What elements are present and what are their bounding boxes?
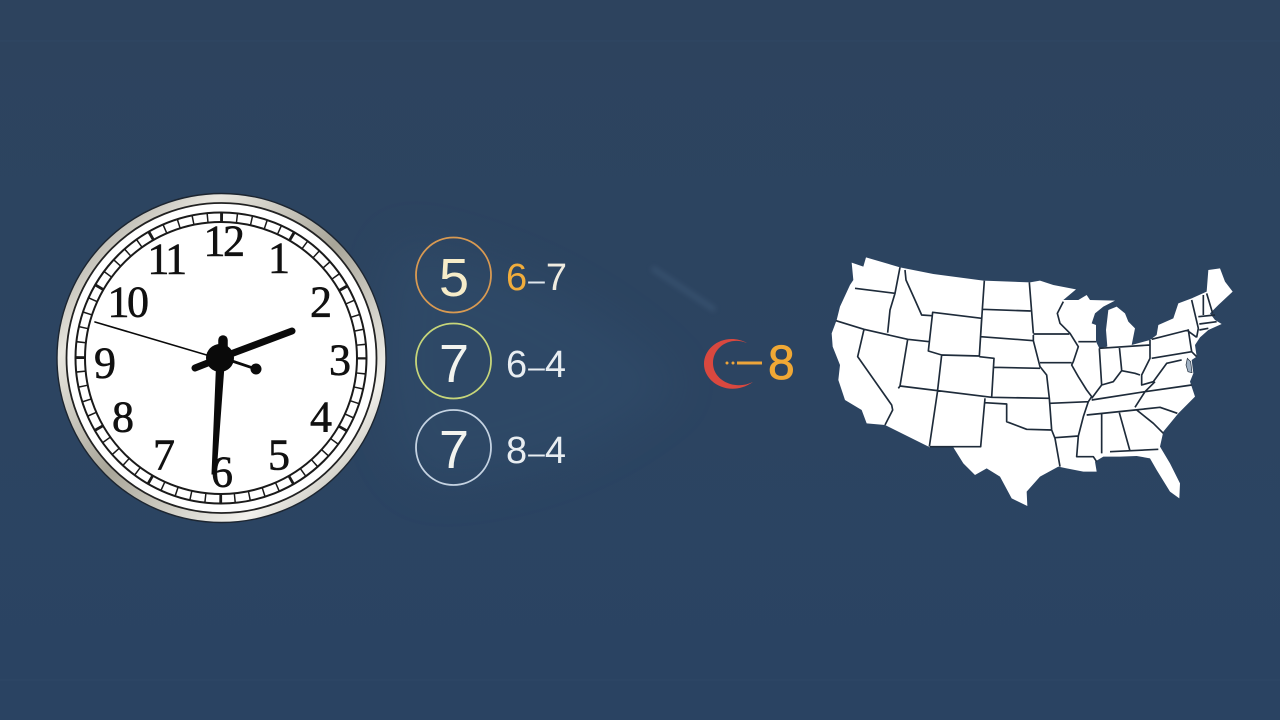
clock — [57, 194, 386, 522]
row 3 badge — [416, 410, 491, 485]
clock numerals: 7 — [153, 430, 175, 480]
clock numerals: 2 — [310, 278, 332, 326]
clock numerals: 12 — [204, 216, 243, 266]
clock numerals: 9 — [94, 338, 116, 388]
row 3 range: 8–4 — [506, 430, 566, 472]
clock numerals: 3 — [329, 336, 351, 384]
dashed connector — [726, 362, 762, 364]
chesapeake bay — [1186, 358, 1192, 373]
row 2 range: 6–4 — [506, 344, 566, 386]
orange number: 8 — [768, 337, 795, 390]
row 1 badge — [416, 238, 491, 312]
clock hands — [95, 322, 292, 474]
clock numerals: 11 — [147, 234, 185, 284]
state borders — [836, 267, 1217, 467]
clock bezel — [57, 194, 386, 522]
hour hand — [195, 331, 292, 368]
minute track — [76, 212, 366, 504]
clock numerals: 4 — [310, 392, 332, 442]
clock numerals — [94, 216, 351, 496]
row 3 badge: 7 — [439, 420, 469, 480]
row 2 badge: 7 — [439, 334, 469, 394]
clock numerals: 1 — [268, 234, 290, 282]
small counter hand — [232, 361, 256, 369]
row 1 range: 6–7 — [506, 257, 567, 299]
time ranges — [416, 238, 567, 485]
clock numerals: 8 — [112, 392, 134, 442]
clock numerals: 6 — [211, 448, 233, 496]
row 2 badge — [416, 324, 491, 398]
counter dot — [250, 364, 262, 374]
hub — [206, 344, 234, 372]
row 1 badge: 5 — [439, 248, 469, 308]
second hand — [95, 322, 210, 356]
clock numerals: 10 — [108, 278, 148, 326]
clock face — [66, 203, 376, 513]
clock numerals: 5 — [268, 430, 290, 480]
crescent and eight — [704, 337, 795, 390]
map silhouette — [832, 257, 1233, 506]
map: United States — [832, 257, 1233, 506]
crescent icon — [704, 339, 753, 389]
minute hand — [212, 366, 224, 474]
top stub — [218, 340, 228, 350]
